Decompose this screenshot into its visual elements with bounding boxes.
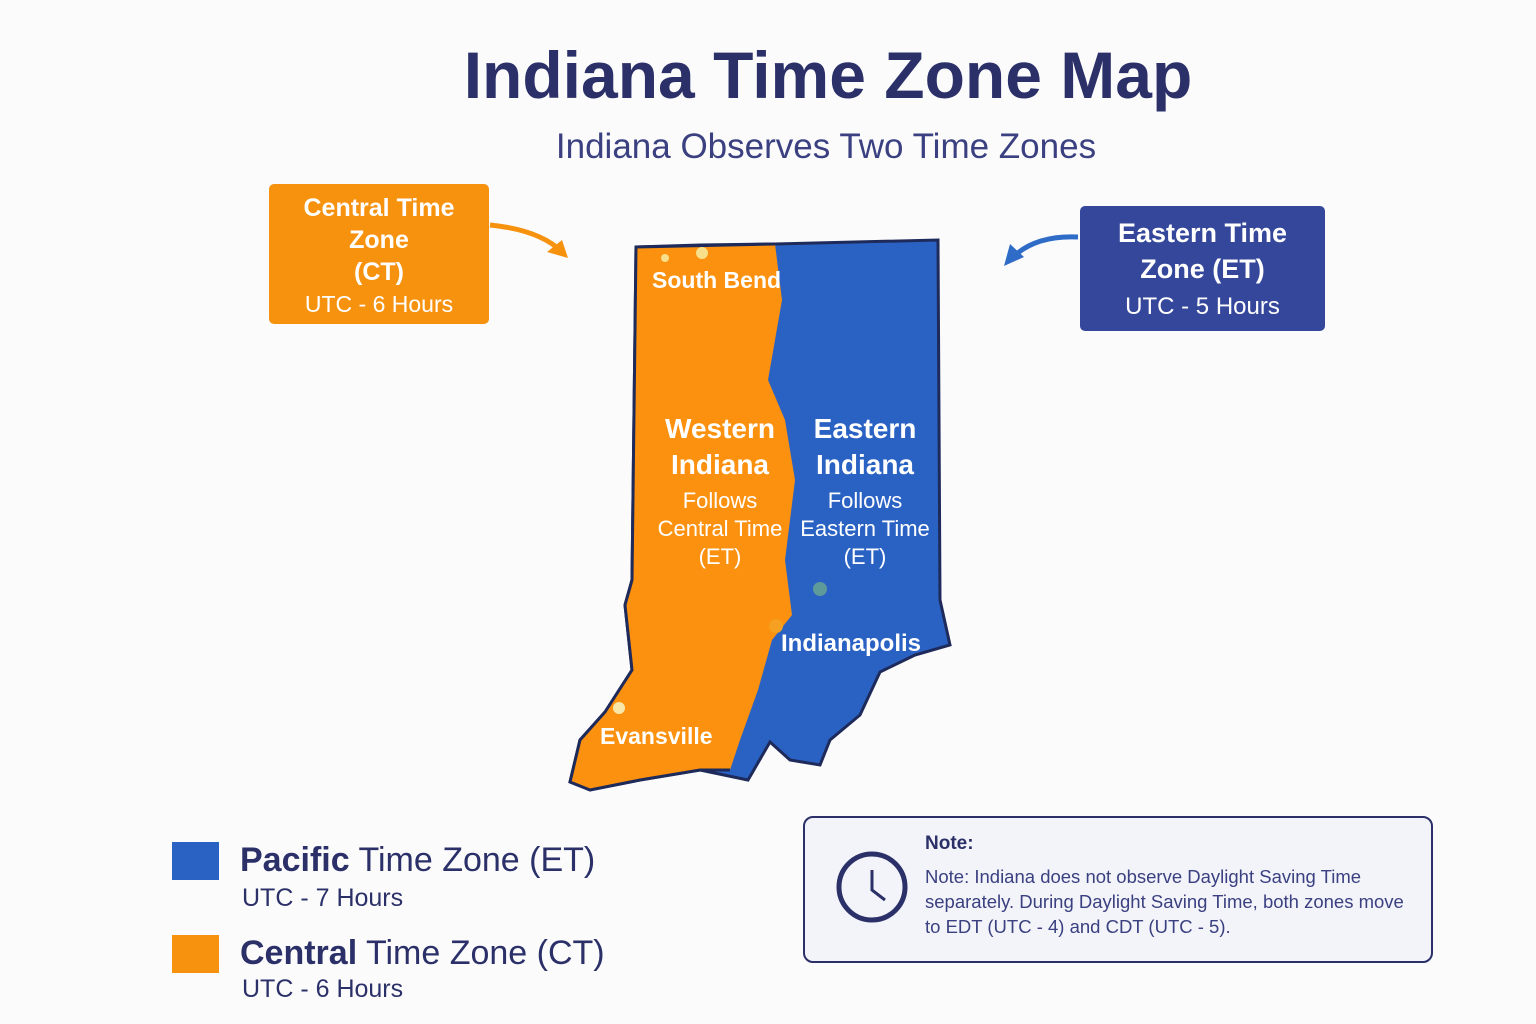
state: western region: [570, 244, 795, 790]
legend item: pacific/eastern: UTC - 7 Hours: [242, 884, 403, 912]
note text: Note: Indiana does not observe Daylight Saving Time separately. During Daylight Saving Time, both zones move to EDT (UTC - 4) and CDT (UTC - 5).: [925, 866, 1404, 937]
map label: Eastern Indiana: [800, 413, 930, 569]
arrow: eastern: [1004, 237, 1078, 266]
note heading: Note:: [925, 833, 974, 854]
map label: Western Indiana: (ET): [699, 544, 741, 569]
map label: South Bend: South Bend: [652, 267, 781, 293]
map label: Western Indiana: Central Time: [658, 516, 782, 541]
map label: Western Indiana: Western: [665, 413, 775, 444]
icon: clock: [836, 852, 908, 922]
legend item: central: [172, 934, 605, 1003]
map label: Eastern Indiana: Indiana: [816, 449, 914, 480]
callout: central time zone: Zone: [349, 226, 409, 254]
legend item: central: Central Time Zone (CT): [240, 934, 605, 972]
callout: eastern time zone: [1080, 206, 1325, 331]
legend: [172, 841, 605, 1003]
map label: Western Indiana: [658, 413, 782, 569]
callout: eastern time zone: Zone (ET): [1140, 254, 1265, 284]
map label: Eastern Indiana: (ET): [844, 544, 886, 569]
callout: eastern time zone: Eastern Time: [1118, 218, 1287, 248]
state: eastern region: [570, 240, 950, 790]
legend item: pacific/eastern: Pacific Time Zone (ET): [240, 841, 595, 879]
note box: [803, 816, 1433, 963]
callout: central time zone: [269, 184, 489, 324]
map label: Eastern Indiana: Eastern: [814, 413, 916, 444]
map label: Evansville: Evansville: [600, 723, 713, 749]
map label: Eastern Indiana: Follows: [828, 488, 902, 513]
map label: Indianapolis: Indianapolis: [781, 630, 921, 657]
map label: Eastern Indiana: Eastern Time: [800, 516, 930, 541]
arrow: central: [490, 225, 568, 258]
subtitle: Indiana Observes Two Time Zones: [556, 127, 1096, 166]
title: Indiana Time Zone Map: [464, 38, 1192, 112]
callout: central time zone: (CT): [354, 258, 404, 286]
map label: Western Indiana: Follows: [683, 488, 757, 513]
callout: central time zone: Central Time: [304, 194, 454, 222]
map label: Western Indiana: Indiana: [671, 449, 769, 480]
callout: central time zone: UTC - 6 Hours: [305, 291, 453, 317]
city dots: [613, 247, 827, 714]
callout: eastern time zone: UTC - 5 Hours: [1125, 293, 1280, 320]
legend item: pacific/eastern: [172, 841, 595, 912]
legend item: central: UTC - 6 Hours: [242, 975, 403, 1003]
